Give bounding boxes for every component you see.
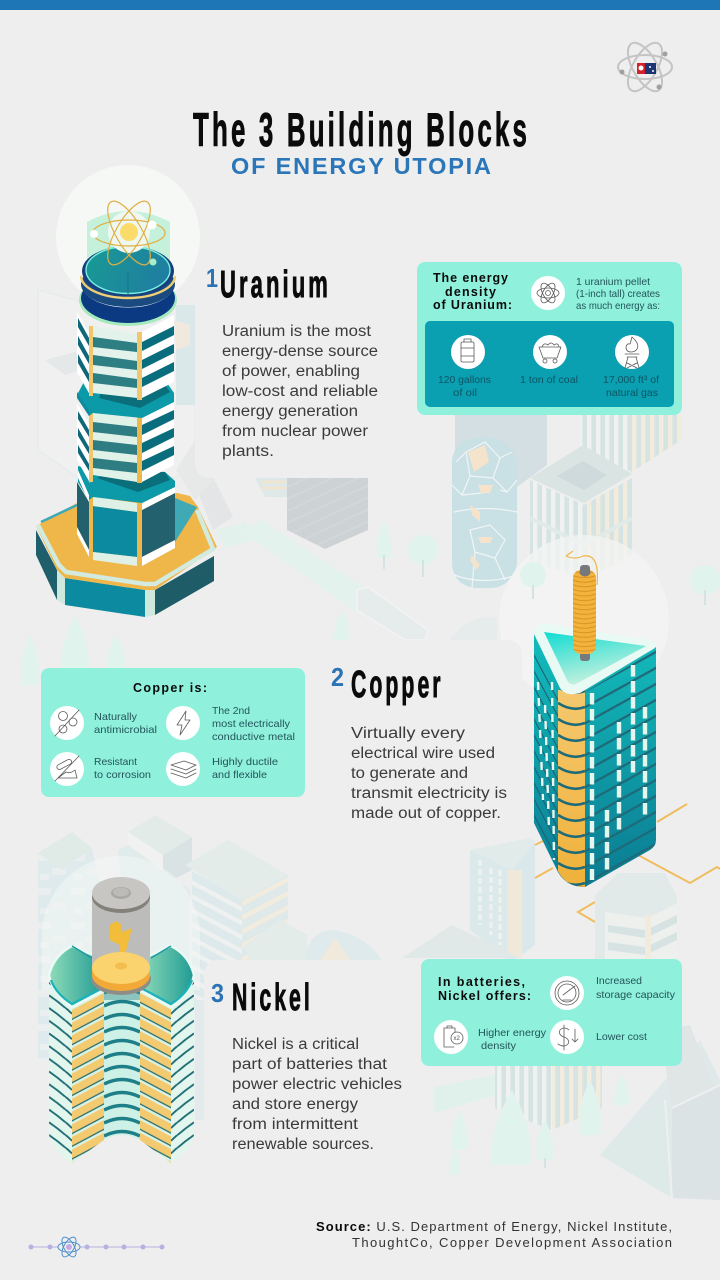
text block: nickel: renewable sources.: [232, 1136, 374, 1153]
text block: copper: electrical wire used: [351, 745, 495, 762]
panel heading: [433, 271, 512, 312]
lower tower segment: [77, 466, 175, 566]
icon: sheets: [166, 752, 200, 786]
nickel glass sphere: [42, 856, 200, 990]
illustration: uranium tower: [36, 165, 217, 617]
panel heading: density: [445, 285, 496, 299]
text block: copper: Virtually every: [351, 725, 465, 742]
label: antimicrobial: [94, 711, 157, 736]
text block: copper: to generate and: [351, 765, 468, 782]
copper wire: [566, 551, 597, 585]
upper tower segment: [77, 312, 174, 400]
panel heading: Copper is:: [133, 681, 207, 695]
pellet description: [576, 276, 660, 312]
text block: nickel: from intermittent: [232, 1116, 359, 1133]
label: ductile: Highly ductile: [212, 756, 278, 768]
icon: oil barrel: [451, 335, 485, 369]
source: ThoughtCo, Copper Development Association: [352, 1235, 672, 1250]
glass sphere: [56, 165, 200, 309]
text block: uranium: energy generation: [222, 403, 358, 420]
label: oil: [438, 374, 491, 399]
icon: lightning: [166, 706, 200, 740]
roof lobes: [49, 946, 104, 1007]
text block: uranium: of power, enabling: [222, 363, 360, 380]
panel heading: The energy: [433, 271, 508, 285]
outer columns: [49, 975, 72, 1163]
background: faded isometric city: [38, 290, 720, 1200]
text block: copper: [351, 725, 507, 822]
background: copper glass sphere: [499, 535, 669, 705]
icon: battery x2: [434, 1020, 468, 1054]
inner panel: equivalents: [425, 321, 674, 407]
icon: battery x2: x2: [454, 1036, 460, 1042]
background: hexagon tower: [452, 437, 517, 588]
base platform: [36, 493, 217, 617]
icon: coal cart: [533, 335, 567, 369]
panel heading: Nickel offers:: [438, 989, 531, 1003]
heading: nickel: 3: [211, 978, 224, 1008]
label: energy density: [478, 1027, 547, 1052]
panel heading: [438, 975, 531, 1003]
text block: uranium: [222, 323, 378, 460]
gold faces: [72, 990, 104, 1163]
label: storage: Increased: [596, 975, 642, 987]
text block: nickel: part of batteries that: [232, 1056, 388, 1073]
text block: nickel: power electric vehicles: [232, 1076, 402, 1093]
label: oil: of oil: [453, 387, 477, 399]
label: natural gas: natural gas: [606, 387, 658, 399]
label: storage: storage capacity: [596, 989, 676, 1001]
label: antimicrobial: Naturally: [94, 711, 138, 723]
background: grey-blue block: [455, 410, 547, 487]
label: ductile: and flexible: [212, 769, 267, 781]
text block: nickel: Nickel is a critical: [232, 1036, 359, 1053]
label: corrosion: to corrosion: [94, 769, 151, 781]
battery: [92, 877, 150, 973]
icon: corrosion: [50, 752, 84, 786]
label: conductive: The 2nd: [212, 705, 250, 717]
text block: copper: made out of copper.: [351, 805, 501, 822]
atom: [90, 195, 165, 271]
middle tower segment: [77, 380, 174, 483]
label: conductive: [212, 705, 295, 743]
label: natural gas: 17,000 ft³ of: [603, 374, 659, 386]
heading: uranium: Uranium: [220, 263, 328, 306]
title: OF ENERGY UTOPIA: [231, 153, 491, 179]
background: text panels: [195, 258, 522, 1170]
heading: copper: Copper: [351, 662, 441, 706]
label: energy density: density: [481, 1040, 517, 1052]
heading: copper: 2: [331, 662, 344, 692]
roof triangle: [544, 632, 646, 684]
text block: uranium: low-cost and reliable: [222, 383, 378, 400]
illustration: copper tower: [534, 551, 657, 887]
label: conductive: conductive metal: [212, 731, 295, 743]
pellet description: (1-inch tall) creates: [576, 288, 660, 300]
label: coal: 1 ton of coal: [520, 374, 578, 386]
icon: gauge: [550, 976, 584, 1010]
background: grey building: [287, 478, 368, 549]
panel heading: of Uranium:: [433, 298, 512, 312]
label: storage: [596, 975, 676, 1001]
top bar: [0, 0, 720, 10]
post: [580, 565, 590, 661]
windows: [592, 665, 645, 880]
battery disc: [91, 952, 151, 995]
tower body: [534, 634, 656, 887]
icon: lower cost: [550, 1020, 584, 1054]
panel: energy density of uranium: [417, 262, 682, 415]
icon: microbes: [50, 706, 84, 740]
roof border: [534, 623, 657, 694]
panel: copper is: [41, 668, 305, 797]
text block: uranium: plants.: [222, 443, 274, 460]
source: [316, 1219, 672, 1250]
green glass cylinder: [87, 211, 170, 272]
label: natural gas: [603, 374, 659, 399]
text block: nickel: [232, 1036, 402, 1153]
panel: nickel in batteries: [421, 959, 682, 1066]
text block: uranium: from nuclear power: [222, 423, 368, 440]
icon: gas flame: [615, 335, 649, 369]
label: cost: Lower cost: [596, 1031, 647, 1043]
label: energy density: Higher energy: [478, 1027, 547, 1039]
uranium cap: [79, 246, 177, 326]
heading: uranium: 1: [206, 263, 218, 293]
floor lines: [585, 650, 656, 887]
heading: nickel: Nickel: [232, 975, 310, 1019]
panel heading: In batteries,: [438, 975, 525, 989]
text block: uranium: energy-dense source: [222, 343, 378, 360]
icon: lightning bolt: [110, 921, 132, 957]
source: Source: U.S. Department of Energy, Nickel Institute,: [316, 1219, 672, 1234]
title: The 3 Building Blocks: [193, 105, 527, 157]
text block: copper: transmit electricity is: [351, 785, 507, 802]
text block: nickel: and store energy: [232, 1096, 358, 1113]
pellet description: as much energy as:: [576, 300, 660, 312]
recessed centre: [104, 990, 140, 1140]
gold face: [558, 690, 585, 887]
background: circuit lines: [535, 804, 720, 922]
background trees: [21, 520, 720, 1175]
label: conductive: most electrically: [212, 718, 291, 730]
illustration: nickel tower: [49, 877, 194, 1163]
pellet description: 1 uranium pellet: [576, 276, 650, 288]
progress indicator: [28, 1235, 164, 1259]
icon: atom: [531, 276, 565, 310]
logo: atom with flag: [618, 38, 672, 96]
label: corrosion: [94, 756, 151, 781]
copper coil: [573, 570, 596, 654]
label: ductile: [212, 756, 278, 781]
label: antimicrobial: antimicrobial: [94, 724, 157, 736]
label: oil: 120 gallons: [438, 374, 491, 386]
label: corrosion: Resistant: [94, 756, 137, 768]
text block: uranium: Uranium is the most: [222, 323, 372, 340]
